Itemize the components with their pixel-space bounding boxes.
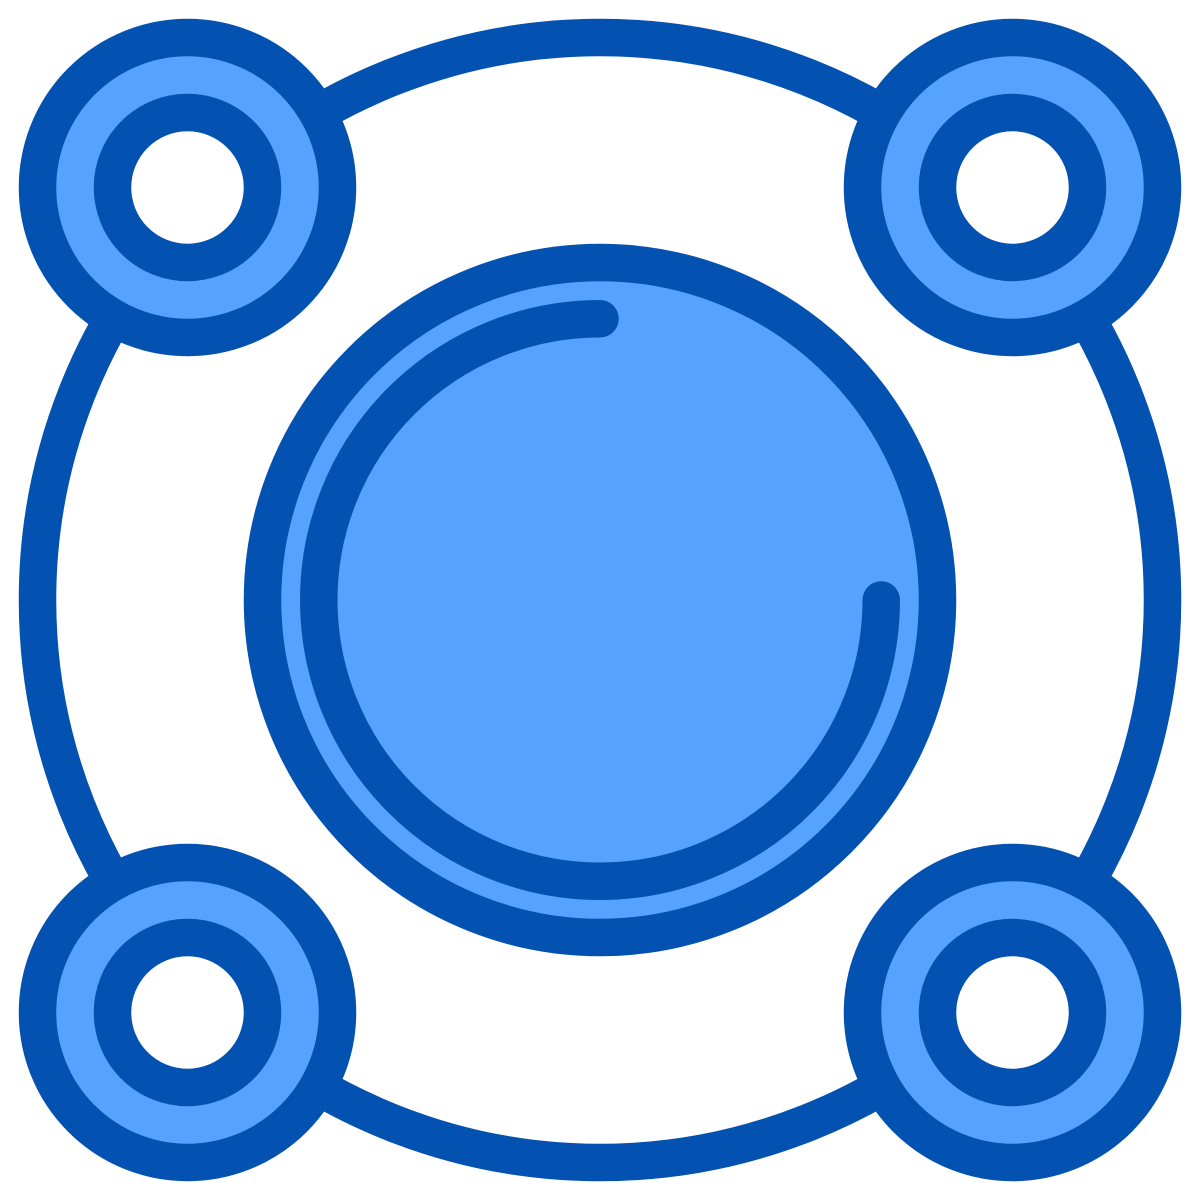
inner highlight arc (319, 319, 881, 881)
node: top right (862, 38, 1162, 338)
node: bottom right (862, 862, 1162, 1162)
central disc (262, 262, 938, 938)
node: bottom left (38, 862, 338, 1162)
node: top left (38, 38, 338, 338)
